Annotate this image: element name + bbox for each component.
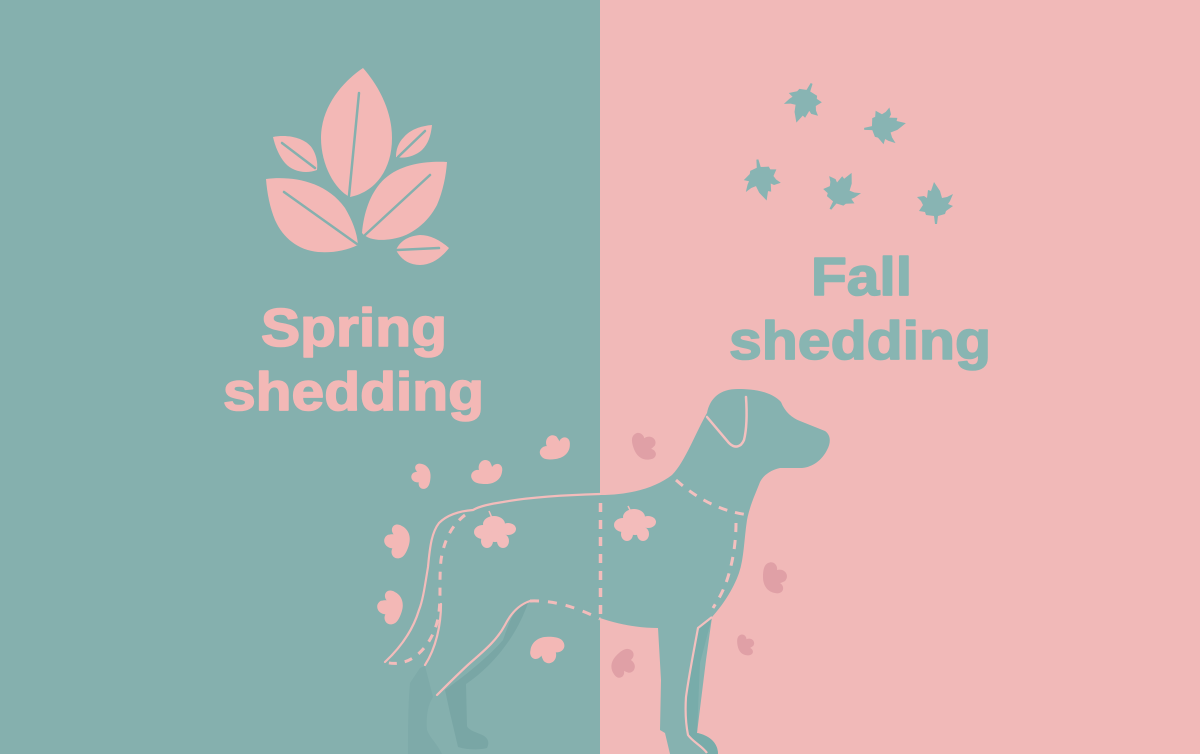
shed fur tufts: spring side xyxy=(373,433,572,663)
leaf: small right xyxy=(396,125,432,158)
tuft 6 xyxy=(530,637,564,663)
heading: fall shedding: shedding xyxy=(729,311,991,371)
belly outline xyxy=(437,601,530,695)
hind far leg shade xyxy=(445,603,528,749)
tuft 1 xyxy=(538,433,572,461)
heading: spring shedding: shedding xyxy=(223,362,484,422)
tuft 2 xyxy=(471,460,502,484)
collar dashed line xyxy=(676,480,750,515)
body leaf right xyxy=(614,506,656,541)
maple leaf 2 xyxy=(863,106,907,146)
chest dashed line xyxy=(713,523,736,608)
maple leaf 5 xyxy=(917,182,953,224)
illustration: dog xyxy=(385,389,830,754)
tuft 4 xyxy=(380,522,414,561)
leaf: large lower left xyxy=(266,178,358,252)
back and tail outline xyxy=(385,494,600,662)
icon: spring leaf cluster xyxy=(266,68,449,265)
hind near leg shade xyxy=(408,666,442,754)
maple leaf 3 xyxy=(741,156,783,204)
leaf: small bottom xyxy=(396,235,449,265)
front far leg shade xyxy=(686,617,718,754)
tuft 1 xyxy=(629,428,661,464)
leaf: top large xyxy=(321,68,392,197)
heading: fall shedding xyxy=(729,247,991,371)
tuft 3 xyxy=(736,633,756,657)
icons: falling maple leaves xyxy=(741,76,953,224)
front leg outline xyxy=(686,617,712,753)
center dashed line xyxy=(599,503,602,618)
ear xyxy=(707,397,747,447)
tail inner outline xyxy=(425,604,441,665)
body leaf left xyxy=(474,511,516,548)
maple leaf 1 xyxy=(779,76,829,130)
belly dashed line xyxy=(530,601,600,619)
heading: spring shedding xyxy=(223,298,484,422)
tuft 5 xyxy=(373,588,407,627)
tuft 2 xyxy=(763,562,787,593)
panel: fall background xyxy=(600,0,1200,754)
panel: spring background xyxy=(0,0,600,754)
tail dashed line xyxy=(385,515,465,663)
tuft 3 xyxy=(410,463,432,489)
tuft 4 xyxy=(606,645,643,682)
dog body right half xyxy=(600,389,830,754)
leaf: small left xyxy=(273,136,317,172)
maple leaf 4 xyxy=(814,164,868,218)
heading: spring shedding: Spring xyxy=(261,298,447,358)
heading: fall shedding: Fall xyxy=(811,247,912,307)
leaf: large lower right xyxy=(362,162,447,240)
shed fur tufts: fall side xyxy=(606,428,787,682)
